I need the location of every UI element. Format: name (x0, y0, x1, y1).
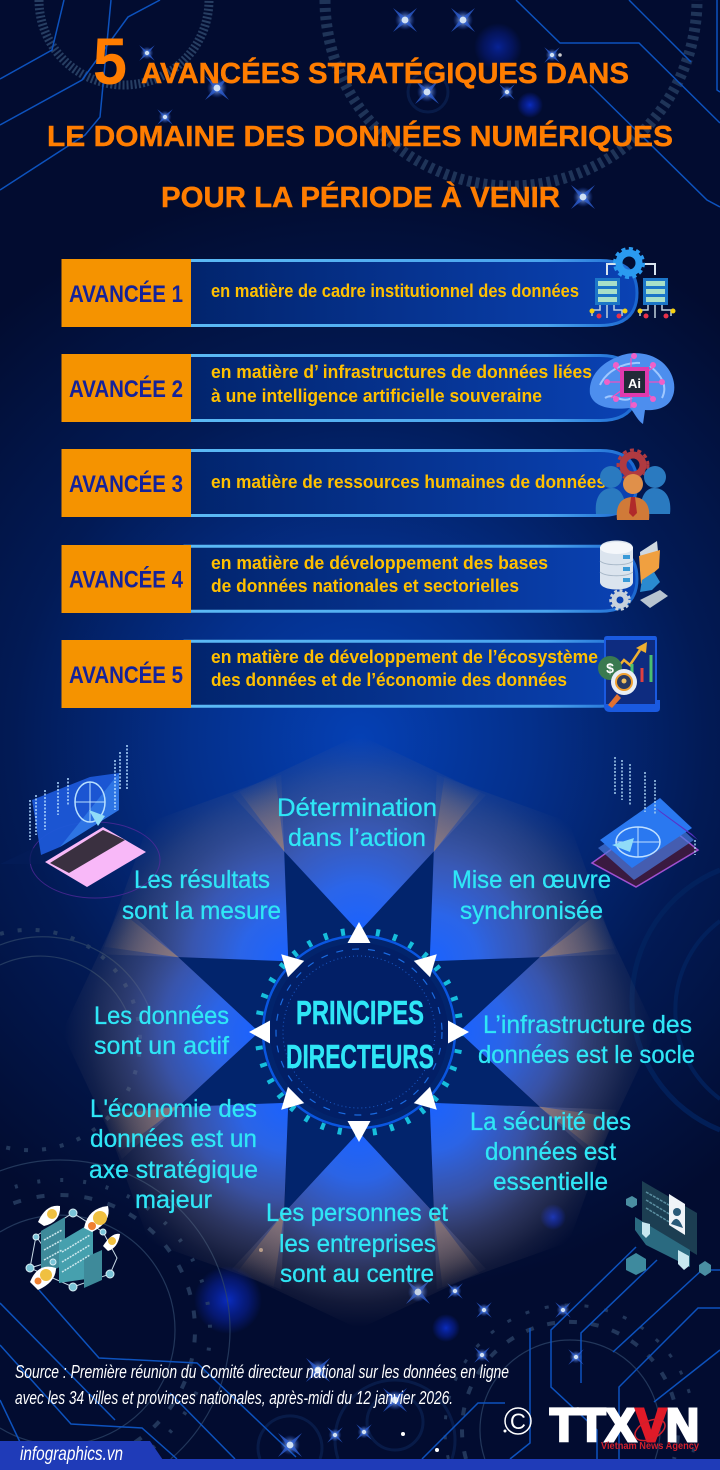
principle: données actif (94, 1002, 229, 1060)
principle: économie des données: L'économie des (90, 1095, 257, 1123)
principle: données actif: sont un actif (94, 1032, 229, 1060)
panel: avancée 4 (62, 545, 637, 613)
title: POUR LA PÉRIODE À VENIR (161, 180, 560, 214)
logo: TTXVN: TTXVN (550, 1399, 699, 1451)
panel: avancée 5: AVANCÉE 5 (69, 661, 183, 689)
principle: personnes et entreprises: Les personnes et (266, 1199, 448, 1227)
icon: AI brain: Ai (628, 376, 641, 391)
principle: sécurité (470, 1108, 631, 1196)
principle: personnes et entreprises: les entreprises (279, 1230, 436, 1258)
principle: mise en oeuvre: Mise en œuvre (452, 866, 611, 894)
title (47, 24, 673, 214)
principle: mise en oeuvre: synchronisée (460, 897, 603, 925)
principle: sécurité: données est (485, 1138, 616, 1166)
logo: TTXVN: Vietnam News Agency (601, 1441, 699, 1452)
icon: AI brain (590, 353, 674, 424)
principle: économie des données (89, 1095, 258, 1214)
title: 5 (93, 24, 127, 98)
title: AVANCÉES STRATÉGIQUES DANS (141, 56, 629, 90)
copyright symbol (504, 1408, 531, 1434)
icon: servers and gear (590, 249, 676, 318)
panel: avancée 4: en matière de développement des bases (211, 553, 548, 573)
source note (15, 1362, 509, 1408)
principle: sécurité: La sécurité des (470, 1108, 631, 1136)
source note: avec les 34 villes et provinces nationales, après-midi du 12 janvier 2026. (15, 1388, 453, 1408)
footer bar with website (0, 1441, 720, 1470)
panel: avancée 2: en matière d’ infrastructures de données liées (211, 362, 592, 382)
principle: résultats: sont la mesure (122, 897, 281, 925)
principle: mise en oeuvre (452, 866, 611, 925)
source note: Source : Première réunion du Comité directeur national sur les données en ligne (15, 1362, 509, 1382)
principle: personnes et entreprises (266, 1199, 448, 1288)
icon: laptop (0, 745, 160, 898)
panel: avancée 5 (62, 640, 637, 708)
central circle: principes directeurs: PRINCIPES (296, 994, 424, 1031)
icon: tablet with globe (592, 757, 698, 887)
central circle: principes directeurs (258, 931, 460, 1133)
icon: database, folder and laptop (600, 540, 668, 610)
principle: personnes et entreprises: sont au centre (280, 1260, 434, 1288)
principle: données actif: Les données (94, 1002, 229, 1030)
principle: détermination (277, 794, 437, 852)
panel: avancée 4: de données nationales et sectorielles (211, 576, 519, 596)
panel: avancée 1 (62, 259, 637, 327)
principle: résultats (122, 866, 281, 925)
principle: détermination: dans l’action (288, 824, 426, 852)
central circle: principes directeurs: DIRECTEURS (286, 1038, 434, 1075)
principle: économie des données: données est un (90, 1125, 257, 1153)
principle: économie des données: majeur (135, 1186, 212, 1214)
principle: détermination: Détermination (277, 794, 437, 822)
principle: infrastructure: données est le socle (478, 1041, 695, 1069)
principle: infrastructure: L’infrastructure des (483, 1011, 692, 1039)
panel: avancée 2 (62, 354, 637, 422)
principle: résultats: Les résultats (134, 866, 270, 894)
icon: people and gear (596, 450, 670, 520)
icon: financial report (598, 636, 660, 712)
footer bar with website: infographics.vn (20, 1444, 123, 1465)
panel: avancée 3: AVANCÉE 3 (69, 470, 183, 498)
panel: avancée 5: en matière de développement de l’écosystème (211, 647, 598, 667)
panel: avancée 4: AVANCÉE 4 (69, 566, 184, 594)
icon: data security (626, 1181, 711, 1276)
panel: avancée 1: en matière de cadre institutionnel des données (211, 281, 579, 301)
panel: avancée 1: AVANCÉE 1 (69, 280, 183, 308)
icon: cloud data network (26, 1206, 120, 1291)
panel: avancée 3: en matière de ressources humaines de données (211, 472, 606, 492)
icon: financial report: $ (606, 660, 614, 676)
star rays (59, 732, 659, 1332)
title: LE DOMAINE DES DONNÉES NUMÉRIQUES (47, 119, 673, 153)
arrows around circle (249, 922, 469, 1142)
panel: avancée 2: AVANCÉE 2 (69, 375, 183, 403)
panel: avancée 2: à une intelligence artificielle souveraine (211, 386, 542, 406)
copyright symbol: C (510, 1409, 526, 1434)
principle: infrastructure (478, 1011, 695, 1069)
principle: sécurité: essentielle (493, 1168, 608, 1196)
principle: économie des données: axe stratégique (89, 1156, 258, 1184)
panel: avancée 3 (62, 449, 637, 517)
panel: avancée 5: des données et de l’économie des données (211, 670, 567, 690)
